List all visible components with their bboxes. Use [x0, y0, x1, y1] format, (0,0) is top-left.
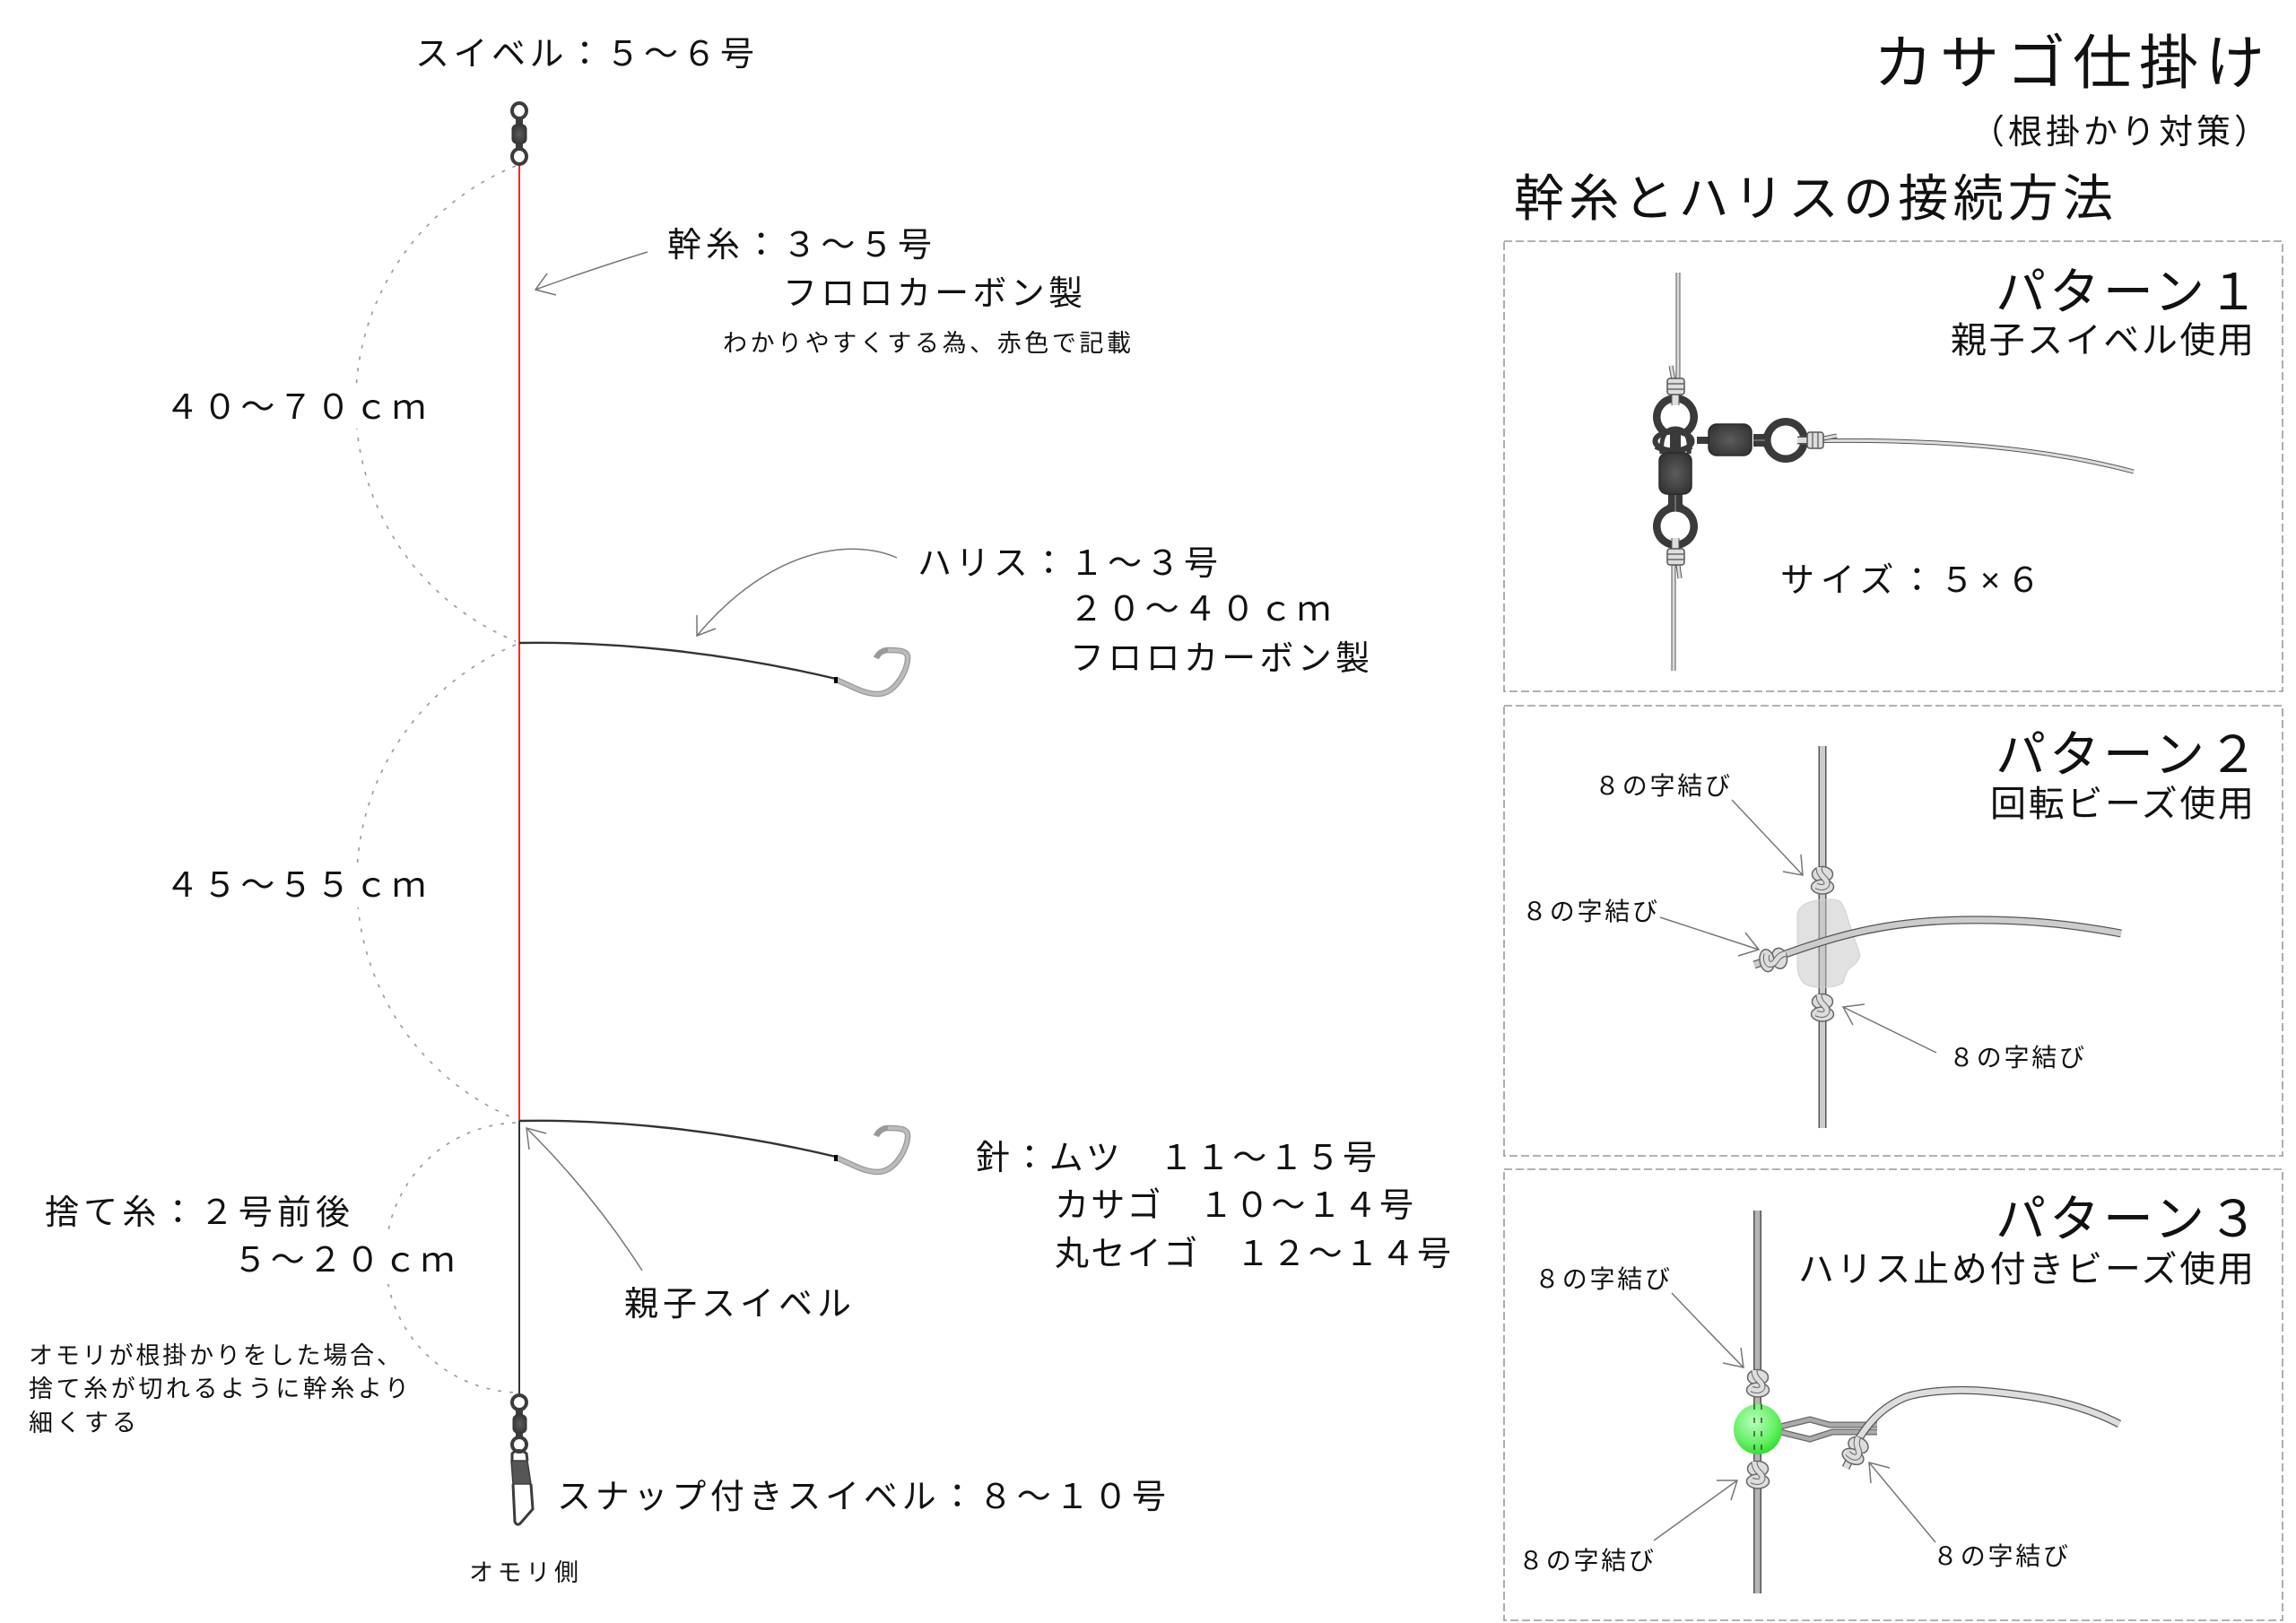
label: sinker line: ５～２０ｃｍ — [233, 1242, 455, 1280]
icon: lower line wrap — [1667, 538, 1684, 578]
label: harisu: ハリス：１～３号 — [918, 545, 1218, 583]
sinker line (black) — [518, 1121, 520, 1396]
pattern 3 knots — [1747, 1370, 1872, 1488]
pattern 2 label upper: ８の字結び — [1595, 772, 1730, 800]
panel: pattern 2 — [1504, 706, 2283, 1156]
label: hook sizes: 丸セイゴ １２～１４号 — [1055, 1236, 1451, 1273]
arrow: main line — [535, 252, 648, 295]
label: harisu: ２０～４０ｃｍ — [1069, 591, 1331, 629]
arrow: three-way swivel — [526, 1128, 642, 1271]
pattern 2 arrow lower — [1843, 1004, 1936, 1053]
pattern 3 label lower right: ８の字結び — [1933, 1542, 2068, 1570]
label: hook sizes — [976, 1140, 1451, 1273]
label: main line: わかりやすくする為、赤色で記載 — [723, 330, 1131, 357]
upper hook line — [519, 643, 908, 694]
distance arcs — [166, 166, 516, 1393]
pattern 2 leader — [1754, 920, 2121, 965]
pattern 2 subtitle: 回転ビーズ使用 — [1990, 785, 2254, 824]
icon: three-way swivel — [1653, 395, 1808, 549]
note: sinker line: 細くする — [29, 1410, 136, 1436]
panel: pattern 1 — [1504, 241, 2283, 691]
label: hook sizes: 針：ムツ １１～１５号 — [976, 1140, 1377, 1177]
pattern 3 heading: パターン３ — [1996, 1191, 2258, 1247]
label: sinker line: 捨て糸：２号前後 — [45, 1194, 350, 1232]
label: length 45-55cm: ４５～５５ｃｍ — [165, 867, 426, 905]
pattern 2 label lower: ８の字結び — [1949, 1044, 2084, 1072]
pattern 1 subtitle: 親子スイベル使用 — [1951, 321, 2254, 360]
pattern 1 heading: パターン１ — [1996, 264, 2258, 320]
icon: snap swivel — [511, 1395, 533, 1524]
icon: side line wrap — [1797, 432, 1837, 448]
label: length 40-70cm: ４０～７０ｃｍ — [165, 389, 426, 427]
label: sinker line — [45, 1194, 455, 1280]
pattern 2 arrow upper — [1732, 800, 1803, 875]
label: top swivel: スイベル：５～６号 — [415, 36, 754, 74]
pattern 1 lines — [1674, 273, 2134, 671]
pattern 2 arrow left — [1660, 917, 1759, 956]
icon: top swivel — [512, 103, 526, 164]
note: sinker line: オモリが根掛かりをした場合、 — [29, 1342, 401, 1369]
pattern 3 main line — [1753, 1211, 1761, 1593]
pattern 3 subtitle: ハリス止め付きビーズ使用 — [1798, 1250, 2254, 1289]
label: main line: フロロカーボン製 — [783, 275, 1083, 313]
pattern 2 bead — [1797, 899, 1860, 987]
label: main line — [667, 227, 1131, 357]
pattern 2 main line — [1819, 746, 1826, 1128]
label: sinker side: オモリ側 — [469, 1559, 578, 1586]
label: hook sizes: カサゴ １０～１４号 — [1055, 1187, 1413, 1225]
pattern 3 leader — [1846, 1390, 2119, 1468]
label: snap swivel: スナップ付きスイベル：８～１０号 — [557, 1479, 1166, 1516]
title: カサゴ仕掛け — [1874, 30, 2265, 96]
note: sinker line — [29, 1342, 409, 1436]
label: main line: 幹糸：３～５号 — [667, 227, 932, 265]
main line (red) — [518, 164, 520, 1121]
pattern 2 heading: パターン２ — [1996, 726, 2258, 783]
pattern 1 size: サイズ：５×６ — [1780, 562, 2040, 600]
panel: pattern 3 — [1504, 1169, 2283, 1620]
note: sinker line: 捨て糸が切れるように幹糸より — [29, 1376, 409, 1402]
pattern 3 arrow upper — [1672, 1293, 1744, 1367]
pattern 2 knots — [1758, 866, 1833, 1021]
label: three-way swivel: 親子スイベル — [624, 1286, 851, 1324]
arrow: harisu — [697, 549, 897, 636]
pattern 3 green bead — [1734, 1404, 1782, 1454]
heading: connection methods: 幹糸とハリスの接続方法 — [1514, 170, 2113, 227]
lower hook line — [519, 1121, 908, 1172]
pattern 3 arrow lower right — [1869, 1462, 1935, 1542]
label: harisu — [918, 545, 1370, 678]
pattern 3 label upper: ８の字結び — [1535, 1265, 1670, 1293]
pattern 3 arrow lower left — [1654, 1480, 1737, 1541]
pattern 3 label lower left: ８の字結び — [1518, 1547, 1654, 1575]
pattern 3 stopper — [1780, 1419, 1877, 1439]
pattern 2 label left: ８の字結び — [1522, 898, 1657, 925]
label: harisu: フロロカーボン製 — [1070, 640, 1370, 678]
icon: upper line wrap — [1667, 366, 1684, 405]
subtitle: （根掛かり対策） — [1970, 114, 2268, 152]
